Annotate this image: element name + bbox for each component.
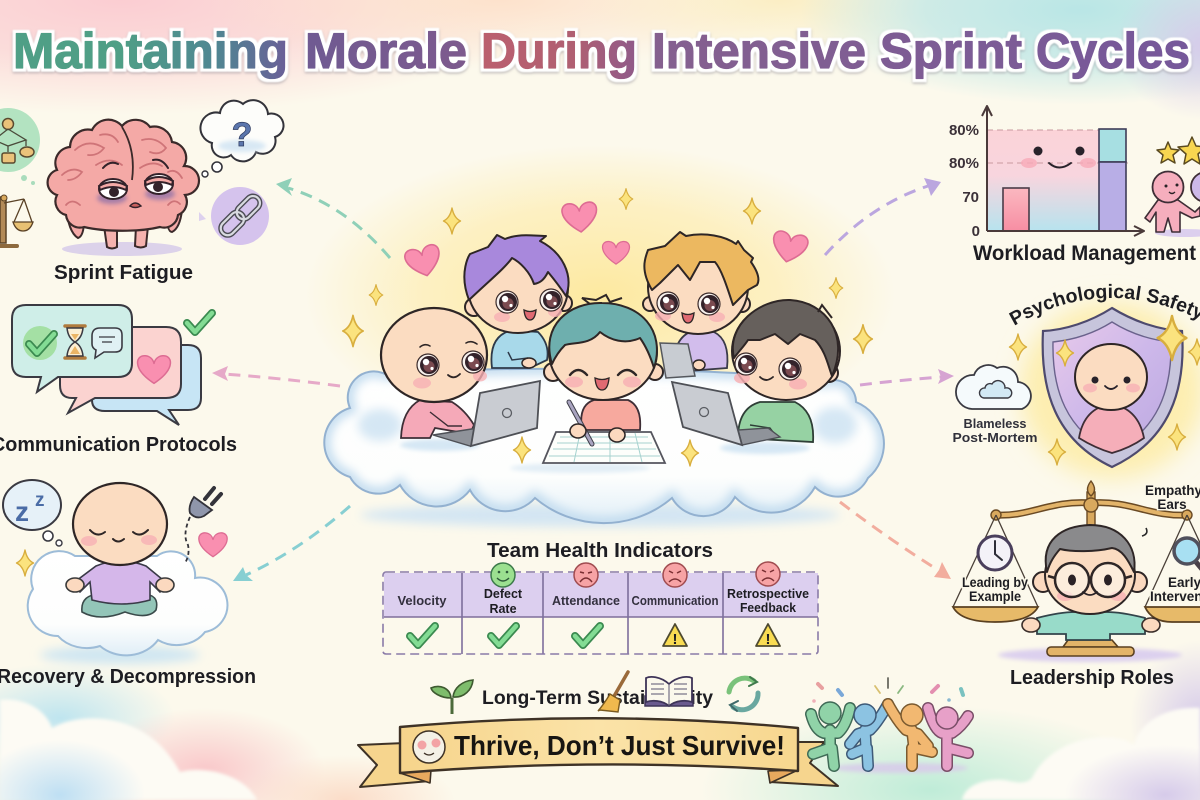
label: empathy ears [1145,483,1200,512]
label: leading by example: Example [969,589,1021,604]
icon: small cloud [956,365,1031,409]
panel: psychological safety [952,284,1200,490]
panel: workload management [949,106,1200,265]
character: teal hair [544,295,663,430]
arrow: to psychological safety [860,369,954,385]
icon: hourglass [65,326,85,358]
icon: sad face retrospective [756,562,780,586]
table: team health indicators [383,562,818,654]
arrow: to sprint fatigue [276,178,390,258]
banner: thrive, don't just survive [358,718,838,787]
arrow: to communication [212,366,340,386]
icon: sleep bubble [3,480,62,546]
icon: check attendance [575,626,600,645]
icon: thought cloud with question mark: ? [232,116,252,154]
label: empathy ears: Ears [1157,497,1187,512]
icon: small chat [92,328,122,358]
title [13,23,1190,79]
label: blameless post-mortem: Post-Mortem [952,430,1038,445]
panel: leadership roles [953,481,1200,689]
icon: recycle arrows [729,677,758,711]
icon: broom [598,672,628,712]
icon: unplugged plug [185,488,221,563]
title: Sprint [880,23,1022,79]
long-term sustainability row [431,672,758,714]
label: sprint fatigue: Sprint Fatigue [54,262,193,284]
shield glow [1020,302,1200,478]
icon: paper with grid [543,432,665,463]
title: Cycles [1036,23,1190,79]
heading: team health indicators: Team Health Indicators [487,540,713,562]
icon: tired brain [48,120,199,248]
icon: teal kid hands and pencil [569,402,625,444]
icon: green check [187,313,212,332]
figure: green [811,702,850,766]
label: blameless post-mortem [952,416,1038,445]
figure: orange [888,704,932,766]
column label: defect rate: Rate [489,602,517,616]
icon: check velocity [410,626,435,645]
icon: right laptop [672,382,780,445]
icon: open book [645,677,693,706]
title: Intensive [652,23,866,79]
icon: check defect [491,626,516,645]
icon: meditation cloud [28,551,227,655]
character: purple hair [464,235,572,368]
icon: heart [138,356,170,383]
icon: magnifier [1174,538,1200,574]
icon: sprout [431,680,473,714]
icon: sleep bubble: z [35,490,44,511]
icon: check circle [23,326,57,360]
title: During [481,23,637,79]
sparkles [1010,316,1200,465]
figure: pink [928,707,968,766]
character: bald pink shirt [381,308,487,438]
label: leadership roles: Leadership Roles [1010,667,1174,689]
arrow: to workload [825,178,941,255]
column label: retrospective feedback: Feedback [740,601,796,615]
column label: communication: Communication [632,594,718,608]
arc guide [1014,298,1200,326]
column label: attendance: Attendance [552,594,620,608]
ribbon folds [400,770,798,783]
bar chart [949,106,1144,240]
bar chart: 80% [949,122,979,139]
label: blameless post-mortem: Blameless [964,416,1026,431]
column label: velocity: Velocity [398,594,447,608]
panel: sprint fatigue [0,100,284,284]
character: yellow hair [643,232,758,372]
icon: clock [978,536,1012,570]
icon: warning retrospective [756,624,780,648]
character: dark hair [732,300,840,442]
column label: defect rate [484,587,523,616]
icon: sad face communication [663,563,687,587]
column label: defect rate: Defect [484,587,523,601]
icon: heart [199,533,227,557]
icon: leader figure [1022,525,1160,656]
arrow: to leadership [840,502,951,579]
cloud shadow [40,646,200,664]
bar chart: 80% [949,155,979,172]
figures with high-five [1145,172,1200,237]
icon: warning retrospective: ! [766,631,770,648]
title: Morale [305,23,467,79]
sparkles [343,189,872,466]
arrow: to recovery [233,506,350,581]
column label: retrospective feedback: Retrospective [727,587,809,601]
ribbon right tail [770,742,838,786]
label: recovery: Recovery & Decompression [0,666,256,688]
figures shadow [832,763,968,773]
label: workload management: Workload Management [973,242,1196,265]
icon: balance scale [0,195,33,246]
icon: sleep bubble: z [15,496,29,527]
brain shadow [62,242,182,256]
icon: org chart circle [0,108,40,185]
icon: scale post [953,481,1200,622]
icon: left laptop [433,381,540,446]
label: early intervention [1150,575,1200,604]
central scene: team on a cloud [324,189,884,527]
icon: speech bubble pink [60,327,181,413]
bar chart: 70 [962,189,979,206]
icon: back laptop [660,343,695,378]
icon: sad face attendance [574,563,598,587]
icon: chain circle [199,187,269,245]
icon: meditating person [66,483,174,617]
label: leading by example [962,575,1028,604]
figure: blue [850,704,888,766]
icon: shield with person [1043,308,1183,467]
icon: speech bubble blue [92,345,201,425]
label: leading by example: Leading by [962,575,1028,590]
icon: stars [1157,137,1200,164]
icon: warning communication: ! [672,631,678,648]
panel: communication protocols [0,305,237,456]
icon: sparkle [16,550,34,576]
icon: warning communication [663,624,687,648]
ribbon main [400,718,798,773]
icon: speech bubble teal [12,305,132,392]
icon: thought cloud with question mark [200,100,284,177]
label: long-term sustainability: Long-Term Sustainability [482,688,713,709]
bar chart: 0 [972,223,980,240]
column label: retrospective feedback [727,587,809,615]
banner text: Thrive, Don’t Just Survive! [454,730,785,761]
hearts [403,202,809,280]
base shadow [998,648,1182,662]
celebrating team figures [811,678,968,773]
confetti [812,678,963,703]
icon: happy face [491,563,515,587]
panel: recovery and decompression [0,480,256,688]
title: Maintaining [13,23,288,79]
ribbon left tail [358,742,430,787]
cloud [324,369,884,527]
icon: badge face [413,731,445,763]
